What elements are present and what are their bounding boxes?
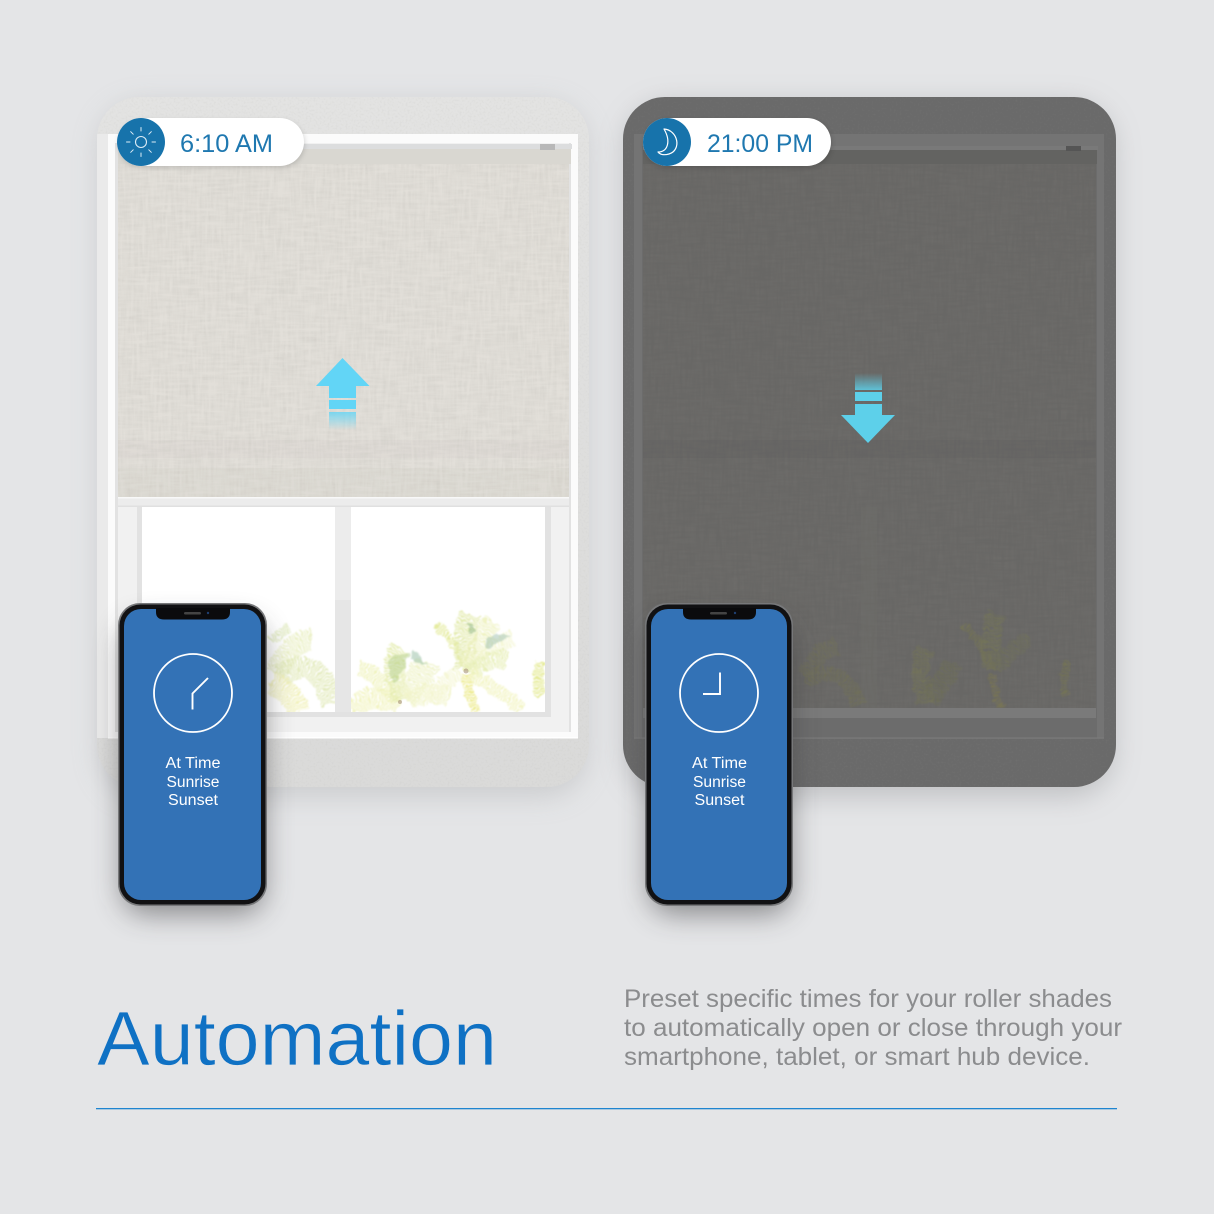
time pill: evening — [643, 118, 832, 168]
schedule options: At Time — [692, 755, 747, 772]
description text: to automatically open or close through your — [624, 1014, 1122, 1042]
darker leaf accents — [388, 623, 510, 682]
palm tree foliage — [272, 614, 542, 712]
time label: 6:10 AM — [180, 130, 273, 158]
icon: clock at 6:10 — [154, 654, 232, 732]
schedule options — [166, 755, 220, 809]
dim palm silhouette — [806, 614, 1068, 708]
window mullion — [335, 507, 351, 712]
phone body — [118, 603, 267, 906]
dark roller headrail — [643, 146, 1098, 151]
description text: Preset specific times for your roller shades — [624, 985, 1112, 1013]
shade hem bar — [118, 506, 569, 507]
phone body — [645, 603, 793, 906]
schedule options: Sunset — [168, 792, 219, 809]
roller shade fabric — [118, 149, 571, 497]
dark window frame — [634, 134, 1104, 739]
phone notch — [683, 608, 756, 620]
icon: sun — [117, 118, 165, 166]
phone notch — [156, 608, 230, 620]
description text — [624, 985, 1122, 1071]
schedule options: At Time — [166, 755, 220, 772]
schedule options: Sunrise — [693, 774, 746, 791]
description text: smartphone, tablet, or smart hub device. — [624, 1043, 1090, 1071]
phone: evening — [645, 603, 793, 914]
dark wall — [623, 97, 1116, 787]
roller headrail — [303, 144, 572, 150]
time pill: morning — [117, 118, 305, 168]
arrow: down — [841, 373, 895, 443]
window frame — [108, 134, 578, 738]
phone screen — [651, 609, 787, 900]
phone: morning — [118, 603, 267, 914]
panel: morning window — [97, 97, 589, 796]
palm trunk centres — [398, 668, 468, 704]
schedule options: Sunset — [694, 792, 745, 809]
icon: clock at 21:00 — [680, 654, 758, 732]
arrow: up — [316, 358, 370, 430]
phone screen — [124, 609, 261, 900]
wall — [97, 97, 589, 787]
title: Automation — [97, 996, 497, 1082]
time label: 21:00 PM — [707, 130, 813, 158]
panel: evening window — [623, 97, 1116, 796]
schedule options: Sunrise — [166, 774, 220, 791]
dark roller shade fabric — [643, 150, 1097, 458]
window glass and view — [142, 507, 545, 712]
icon: moon — [643, 118, 691, 166]
dark hem bar — [643, 708, 1096, 718]
schedule options — [692, 755, 747, 809]
